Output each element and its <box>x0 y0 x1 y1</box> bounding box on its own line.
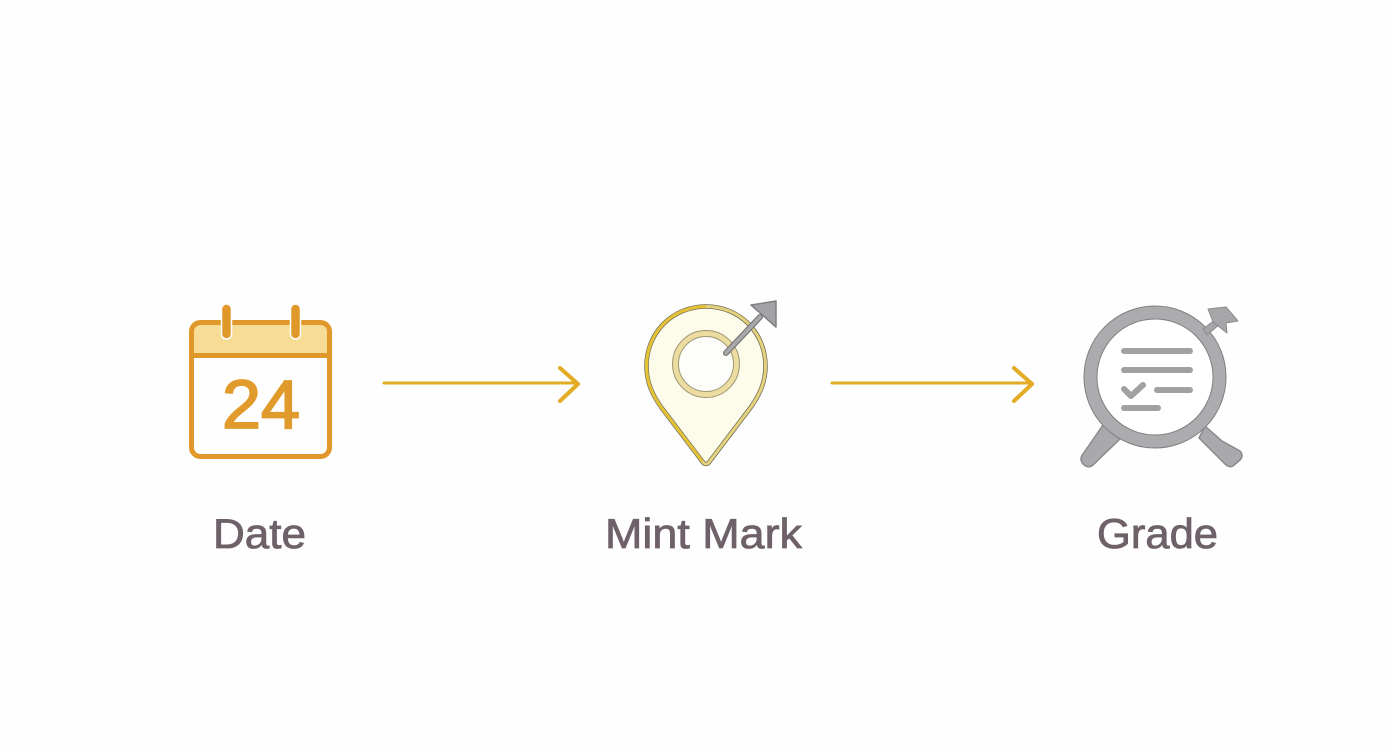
arrow: date to mint mark <box>384 368 578 401</box>
magnifier handles <box>1081 425 1242 467</box>
star arrow <box>1203 307 1238 335</box>
icon: map pin with arrow <box>646 301 776 464</box>
step: grade <box>1081 307 1242 557</box>
step: date <box>191 304 330 557</box>
label: date: Date <box>213 510 306 557</box>
label: mint mark: Mint Mark <box>605 510 803 557</box>
pointer arrow <box>726 301 776 353</box>
icon: magnifying glass with checklist <box>1081 307 1242 467</box>
icon: calendar <box>191 304 330 456</box>
magnifier ring <box>1090 312 1220 442</box>
arrow: mint mark to grade <box>832 368 1032 401</box>
checklist <box>1124 351 1190 408</box>
step: mint mark <box>605 301 803 557</box>
calendar number: 24 <box>222 366 300 443</box>
label: grade: Grade <box>1097 510 1218 557</box>
